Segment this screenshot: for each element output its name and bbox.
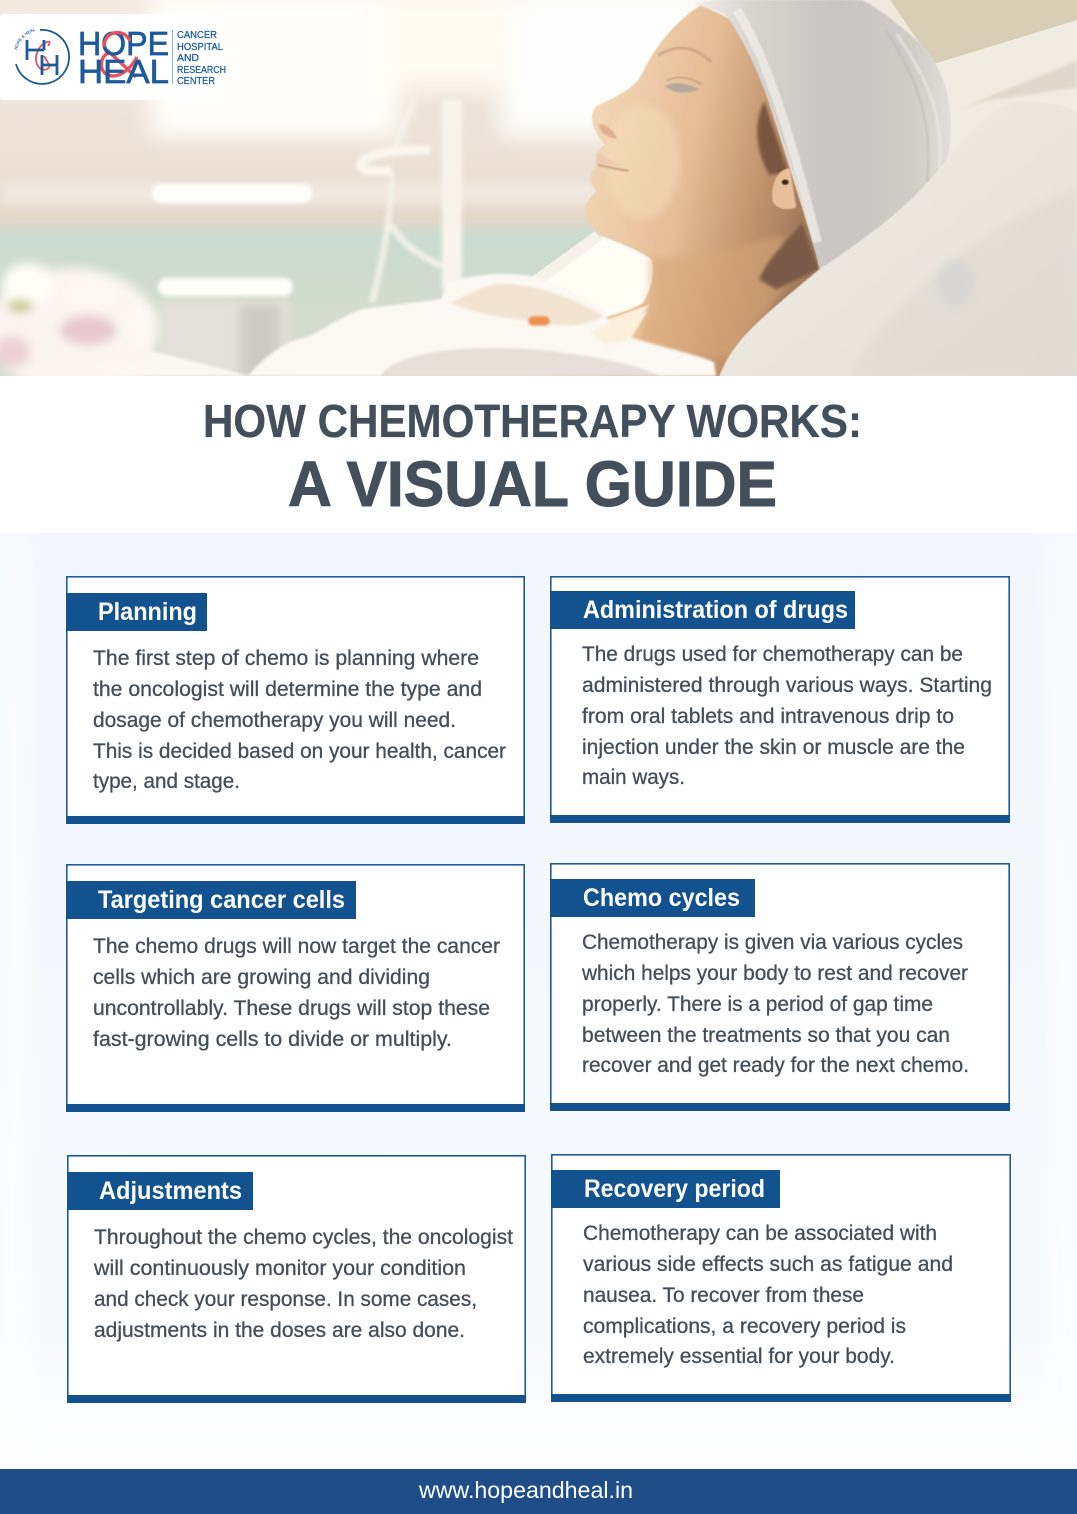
text: Recovery period <box>583 1221 953 1368</box>
text: Administration of drugs: main ways. <box>582 765 685 789</box>
text: Recovery period: various side effects such as fatigue and <box>583 1252 953 1276</box>
text: Administration of drugs: The drugs used for chemotherapy can be <box>582 642 963 666</box>
skin <box>540 5 821 380</box>
panel: Administration of drugs <box>550 577 1010 823</box>
logo wordmark: HOPE <box>78 25 169 62</box>
logo emblem: HOPE & HEAL <box>14 28 36 50</box>
heading: Recovery period <box>551 1170 780 1208</box>
text: Targeting cancer cells: The chemo drugs will now target the cancer <box>93 934 500 958</box>
lower pillow <box>718 163 1077 376</box>
heading: Planning: Planning <box>98 598 197 626</box>
heading: Targeting cancer cells: Targeting cancer cells <box>98 886 345 914</box>
title: A VISUAL GUIDE <box>288 448 777 520</box>
heading: Chemo cycles <box>550 879 755 917</box>
text: Planning <box>93 646 506 793</box>
text: Chemo cycles: Chemotherapy is given via various cycles <box>582 930 963 954</box>
logo descriptor: CENTER <box>177 75 215 87</box>
logo descriptor: CANCER <box>177 29 217 41</box>
text: Adjustments: will continuously monitor your condition <box>93 1256 466 1280</box>
text: Planning: dosage of chemotherapy you will need. <box>93 708 456 732</box>
heading: Administration of drugs: Administration of drugs <box>583 596 848 624</box>
text: Adjustments: and check your response. In some cases, <box>94 1287 477 1311</box>
logo descriptor: RESEARCH <box>177 64 226 76</box>
logo <box>0 14 226 100</box>
logo descriptor <box>177 29 226 87</box>
logo wordmark: HEAL <box>78 53 169 90</box>
text: Chemo cycles: which helps your body to rest and recover <box>581 961 968 985</box>
title <box>203 395 862 520</box>
text: Administration of drugs: from oral tablets and intravenous drip to <box>582 704 954 728</box>
heading: Adjustments: Adjustments <box>99 1177 242 1205</box>
content background <box>0 533 1077 1469</box>
title: HOW CHEMOTHERAPY WORKS: <box>203 395 862 447</box>
text: Targeting cancer cells: fast-growing cells to divide or multiply. <box>93 1027 452 1051</box>
footer bar with website <box>0 1469 1077 1514</box>
blanket and gown <box>100 274 716 376</box>
eye <box>665 83 699 93</box>
back wall right <box>890 0 1077 64</box>
hero photo: patient resting in hospital bed <box>0 0 1077 392</box>
heading: Administration of drugs <box>550 591 855 629</box>
text: Adjustments: adjustments in the doses are also done. <box>94 1318 465 1342</box>
heading: Recovery period: Recovery period <box>584 1175 765 1203</box>
logo descriptor: AND <box>177 52 199 64</box>
logo wordmark <box>78 25 169 90</box>
text: Chemo cycles: between the treatments so that you can <box>582 1023 950 1047</box>
iv tube <box>1006 0 1036 30</box>
ear <box>772 168 796 209</box>
text: Planning: the oncologist will determine the type and <box>93 677 482 701</box>
scarf <box>694 0 951 269</box>
panel: Recovery period <box>551 1155 1011 1402</box>
text: Adjustments: Throughout the chemo cycles, the oncologist <box>94 1225 513 1249</box>
hair and neck shadow <box>757 101 788 175</box>
text: Recovery period: nausea. To recover from these <box>583 1283 864 1307</box>
neck shading <box>636 236 800 357</box>
bright glow behind the neck <box>545 235 653 316</box>
heading: Adjustments <box>67 1172 253 1210</box>
text: Targeting cancer cells: cells which are growing and dividing <box>93 965 430 989</box>
text: Targeting cancer cells <box>93 934 500 1051</box>
heading: Planning <box>66 593 207 631</box>
text: Administration of drugs: administered through various ways. Starting <box>582 673 992 697</box>
text: Chemo cycles: properly. There is a period of gap time <box>582 992 933 1016</box>
mouth line <box>598 165 628 171</box>
panel: Adjustments <box>67 1156 526 1403</box>
neck light <box>606 304 650 324</box>
text: Adjustments <box>93 1225 513 1342</box>
panel: Chemo cycles <box>550 864 1010 1111</box>
text: Planning: This is decided based on your health, cancer <box>93 739 506 763</box>
heading: Targeting cancer cells <box>66 881 356 919</box>
logo emblem <box>14 28 70 85</box>
logo divider <box>172 30 173 84</box>
text: Targeting cancer cells: uncontrollably. These drugs will stop these <box>93 996 490 1020</box>
footer bar with website: www.hopeandheal.in <box>418 1477 633 1503</box>
panel: Planning <box>66 577 525 824</box>
heading: Chemo cycles: Chemo cycles <box>583 884 740 912</box>
text: Planning: type, and stage. <box>93 769 240 793</box>
upper pillow <box>936 38 1077 236</box>
text: Administration of drugs <box>582 642 992 789</box>
text: Recovery period: extremely essential for your body. <box>583 1344 895 1368</box>
text: Chemo cycles: recover and get ready for the next chemo. <box>582 1053 969 1077</box>
eyebrow <box>658 48 711 62</box>
person and bed, drawn in close-up coordinates <box>506 0 1077 380</box>
text: Recovery period: complications, a recovery period is <box>583 1314 906 1338</box>
text: Chemo cycles <box>581 930 969 1077</box>
text: Planning: The first step of chemo is planning where <box>93 646 479 670</box>
bed rail <box>532 231 602 280</box>
blurred flowers <box>0 263 158 392</box>
logo descriptor: HOSPITAL <box>177 41 223 53</box>
logo plate <box>0 14 250 100</box>
text: Administration of drugs: injection under the skin or muscle are the <box>582 735 965 759</box>
text: Recovery period: Chemotherapy can be associated with <box>583 1221 937 1245</box>
panel: Targeting cancer cells <box>66 865 525 1112</box>
nostril <box>598 124 617 139</box>
